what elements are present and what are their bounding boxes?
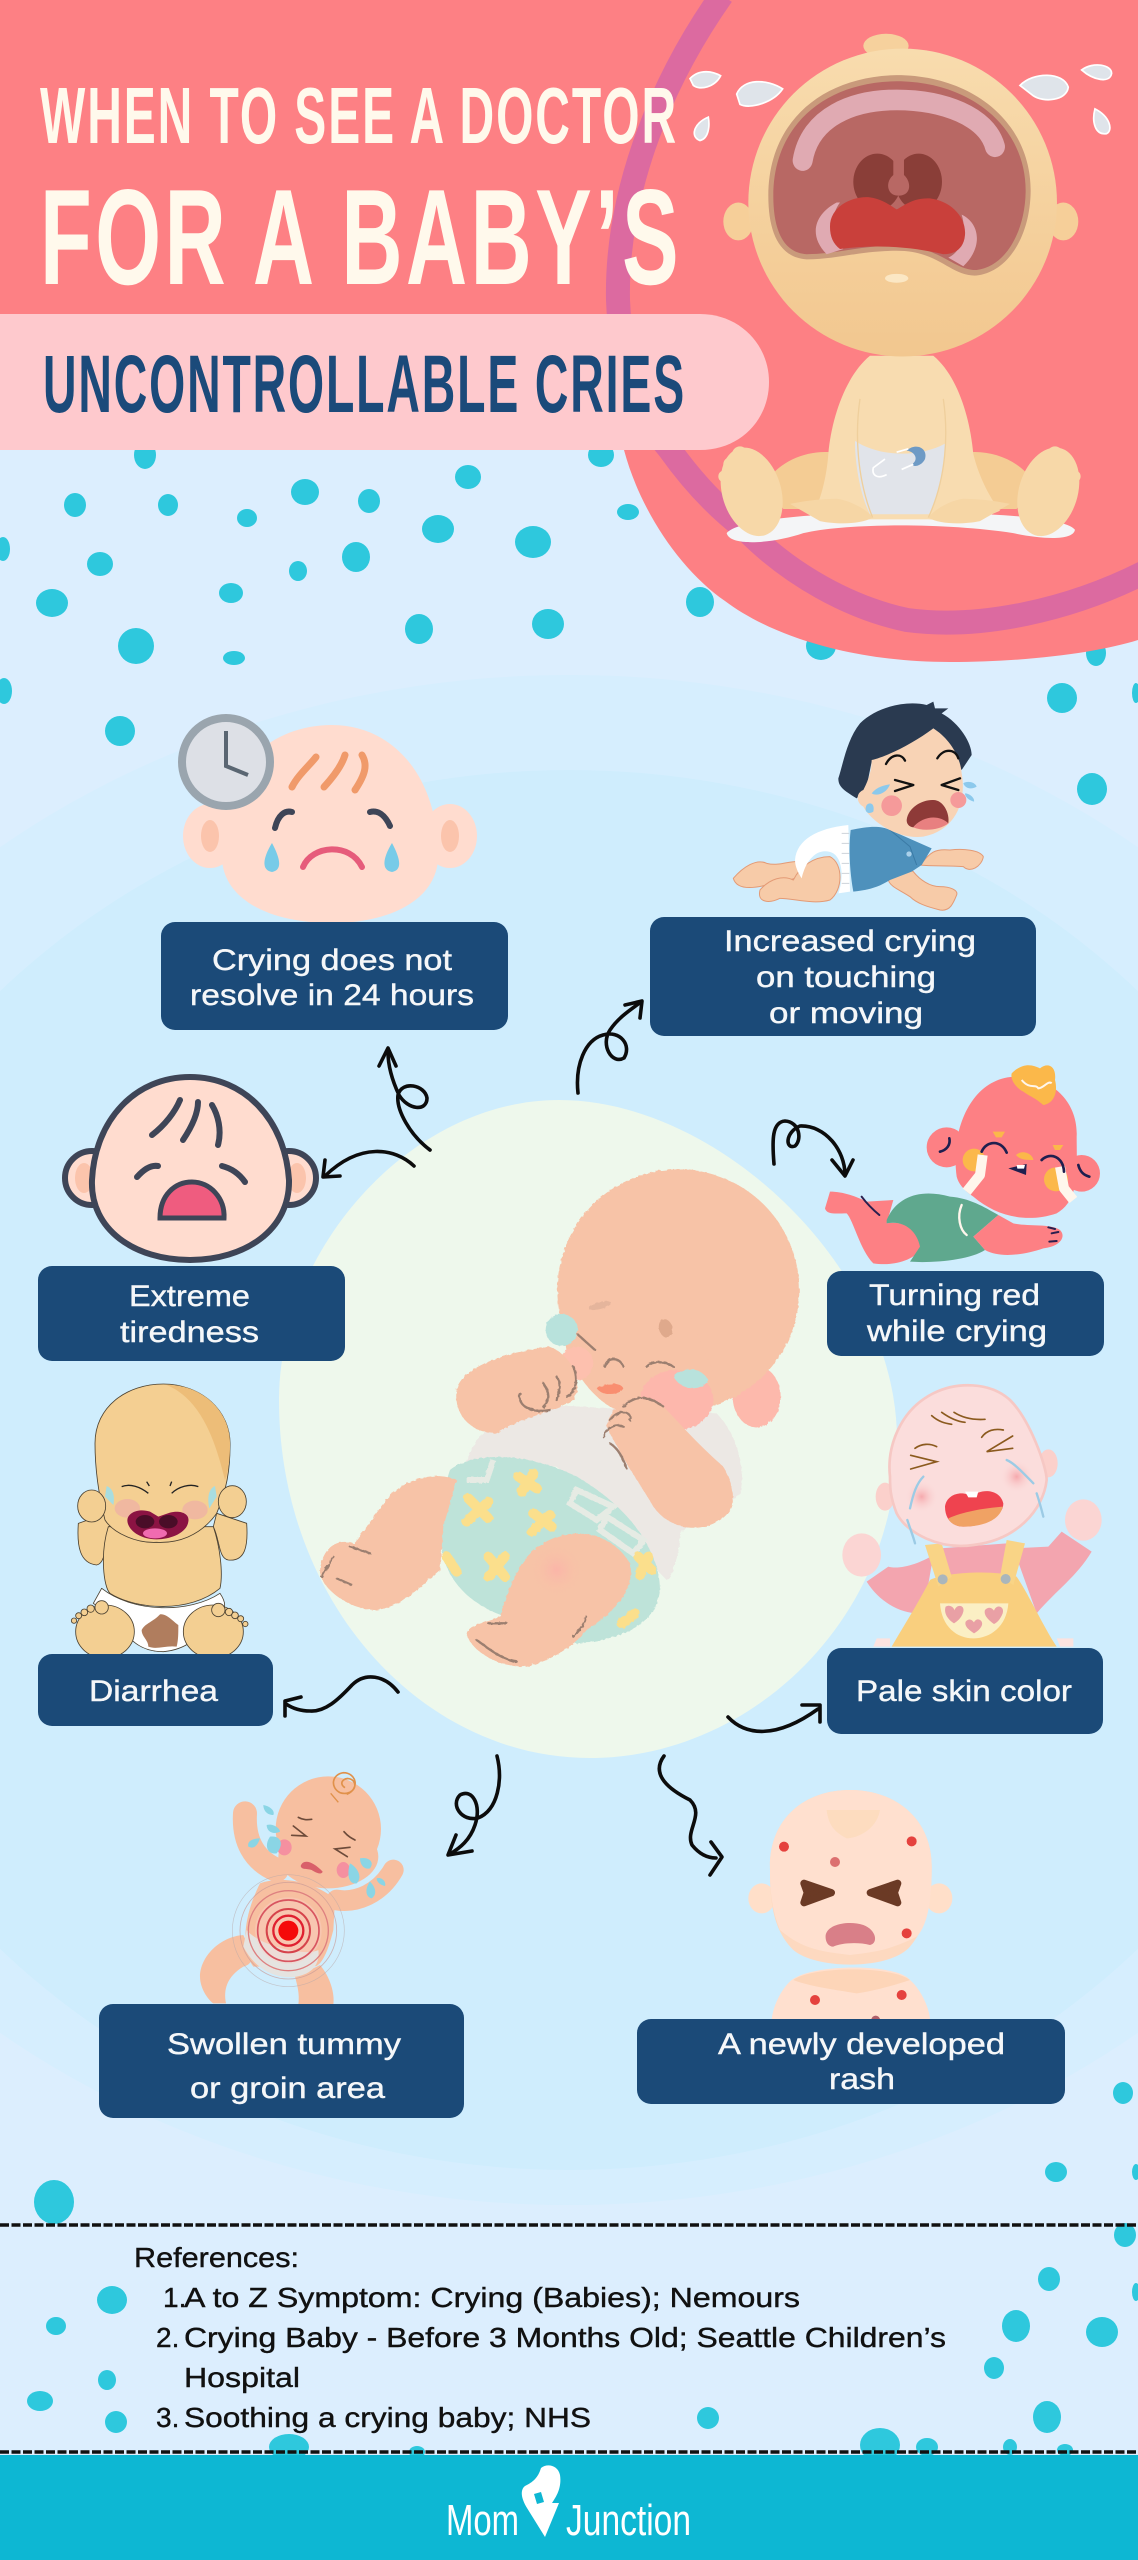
dashed dividers xyxy=(0,2225,1138,2452)
card: swollen tummy: Swollen tummy xyxy=(167,2028,401,2061)
card: diarrhea xyxy=(38,1654,273,1726)
card: increased crying: on touching xyxy=(756,961,936,994)
arrow: to increased crying xyxy=(577,1001,642,1093)
MomJunction logo: Mom xyxy=(446,2496,519,2545)
pain target rings xyxy=(232,1875,344,1987)
card: increased crying: Increased crying xyxy=(724,925,976,958)
card: newly developed rash: A newly developed xyxy=(718,2028,1005,2061)
references block: References: xyxy=(134,2242,299,2273)
references block: 2. xyxy=(156,2322,179,2353)
card: extreme tiredness: tiredness xyxy=(120,1316,259,1349)
arrow: to rash xyxy=(659,1756,722,1875)
card: crying does not resolve: resolve in 24 hours xyxy=(190,979,474,1012)
card: extreme tiredness xyxy=(38,1266,345,1361)
card: crying does not resolve xyxy=(161,922,508,1030)
illustration: crawling boy xyxy=(733,702,983,910)
card: diarrhea: Diarrhea xyxy=(89,1675,218,1708)
subtitle pill xyxy=(0,314,769,450)
illustration: pale crying baby xyxy=(842,1385,1102,1647)
card: turning red: Turning red xyxy=(869,1279,1040,1312)
illustration: baby with diarrhea xyxy=(71,1384,248,1658)
card: swollen tummy: or groin area xyxy=(190,2072,385,2105)
logo mother and child icon xyxy=(522,2465,560,2537)
card: crying does not resolve: Crying does not xyxy=(212,944,453,977)
MomJunction logo: Junction xyxy=(566,2496,691,2545)
arrow: to pale skin xyxy=(728,1705,820,1731)
card: turning red: while crying xyxy=(866,1315,1047,1348)
arrow: to diarrhea xyxy=(285,1677,398,1716)
references block: 1. xyxy=(163,2282,186,2313)
card: newly developed rash xyxy=(637,2019,1065,2104)
arrow: to swollen tummy xyxy=(448,1756,499,1855)
illustration: central crying baby xyxy=(320,1169,799,1667)
card: newly developed rash: rash xyxy=(829,2063,895,2096)
references block: Soothing a crying baby; NHS xyxy=(184,2402,591,2433)
card: increased crying xyxy=(650,917,1036,1036)
references block xyxy=(134,2242,946,2433)
references block: 3. xyxy=(156,2402,179,2433)
card: extreme tiredness: Extreme xyxy=(129,1280,250,1313)
references block: Crying Baby - Before 3 Months Old; Seattle Children’s xyxy=(184,2322,946,2353)
illustration: crying baby in header xyxy=(690,34,1112,544)
card: pale skin color: Pale skin color xyxy=(856,1675,1072,1708)
footer band xyxy=(0,2455,1138,2560)
illustration: baby with rash xyxy=(748,1790,952,2024)
card: turning red xyxy=(827,1271,1104,1356)
card: increased crying: or moving xyxy=(769,997,923,1030)
illustration: red-faced baby xyxy=(825,1065,1100,1264)
facial features and fingers xyxy=(322,1299,708,1662)
decorative teal dots xyxy=(0,441,1138,2462)
title line 1: WHEN TO SEE A DOCTOR xyxy=(40,71,678,160)
header: coral banner with circle and ring xyxy=(0,0,1138,662)
title line 2: FOR A BABY’S xyxy=(40,161,682,313)
center circle xyxy=(279,1100,897,1758)
MomJunction logo xyxy=(446,2465,691,2545)
arrow: to extreme tiredness xyxy=(323,1151,414,1177)
card: pale skin color xyxy=(827,1648,1103,1734)
references block: Hospital xyxy=(184,2362,300,2393)
illustration: baby with swollen tummy xyxy=(200,1773,393,2005)
arrow: to turning red xyxy=(773,1121,853,1176)
references block: A to Z Symptom: Crying (Babies); Nemours xyxy=(184,2282,800,2313)
illustration: tired baby face xyxy=(65,1077,316,1260)
diaper flowers xyxy=(447,1473,652,1623)
illustration: baby head with clock xyxy=(182,718,477,923)
clock icon xyxy=(182,718,270,806)
card: swollen tummy xyxy=(99,2004,464,2118)
arrow: to crying does not resolve xyxy=(379,1048,430,1150)
